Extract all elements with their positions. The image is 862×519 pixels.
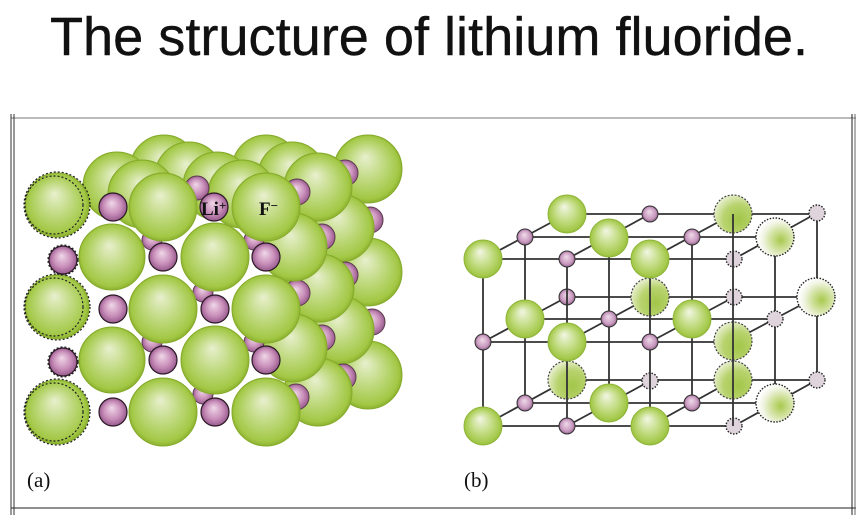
label: Li+: + (219, 198, 226, 213)
lithium ions, front (48, 193, 280, 426)
back plane (548, 195, 835, 399)
front column of fluoride ions (232, 173, 300, 446)
title: The structure of lithium fluoride. (50, 7, 808, 67)
panel b: ball and stick model (464, 195, 835, 492)
label: Li+: Li (201, 199, 219, 220)
label: F-: − (271, 198, 278, 213)
middle plane (506, 218, 794, 422)
label: F-: F (259, 199, 271, 220)
picture frame (11, 114, 856, 515)
depth bonds (483, 213, 817, 426)
front plane (464, 214, 752, 445)
label: (a): (a) (27, 468, 50, 492)
label: (b): (b) (464, 468, 488, 492)
panel a: space-filling model (24, 135, 402, 492)
middle layer of fluoride ions (142, 153, 358, 426)
back layers of fluoride ions (83, 135, 402, 409)
front layer of fluoride ions (24, 172, 249, 446)
